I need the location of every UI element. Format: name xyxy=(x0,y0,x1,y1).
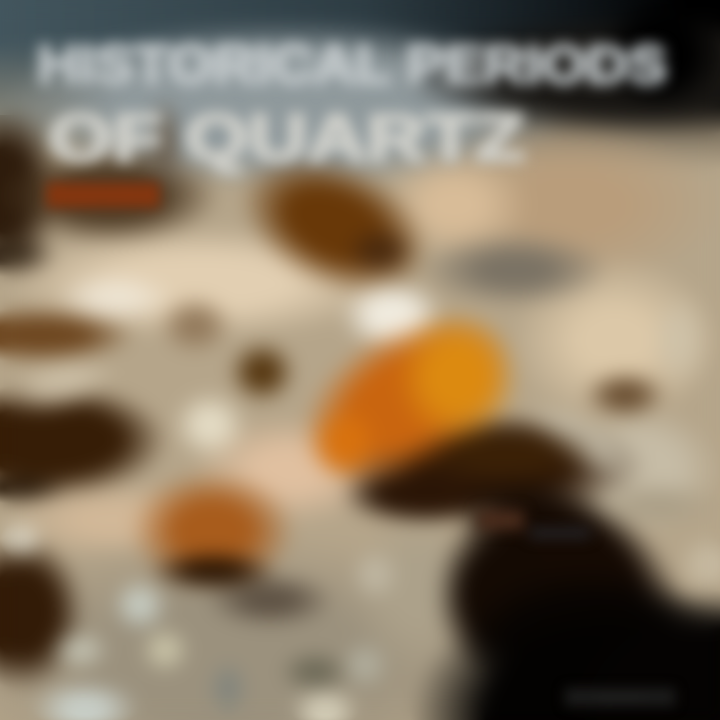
orange subtitle label xyxy=(40,176,164,213)
top-right dark corner xyxy=(400,10,720,145)
top-right black corner xyxy=(600,0,720,110)
title backdrop xyxy=(0,20,580,190)
amber crystal: small xyxy=(130,468,294,600)
faint caption on dark shadow xyxy=(474,504,590,543)
footer watermark: quartz xyxy=(599,689,641,705)
title xyxy=(30,34,676,182)
top dark sky band xyxy=(0,0,720,170)
title: OF QUARTZ xyxy=(49,100,525,174)
amber crystal: large xyxy=(299,307,522,488)
footer watermark xyxy=(563,686,676,709)
orange subtitle label: Overview xyxy=(46,182,158,209)
crevice under amber crystal xyxy=(410,420,600,490)
title: HISTORICAL PERIODS xyxy=(37,35,667,95)
